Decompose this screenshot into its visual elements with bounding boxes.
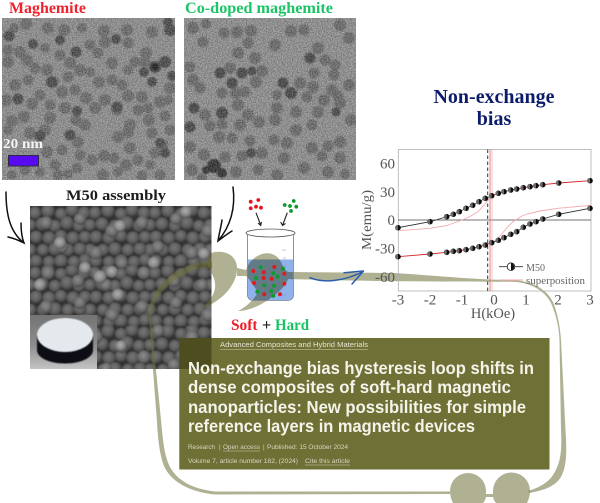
bias marker lines [488,150,492,291]
article meta line: | [219,444,221,451]
M50 curves [398,196,590,243]
title line 2: dense composites of soft-hard magnetic [188,377,511,397]
arrow: maghemite to assembly [6,192,24,243]
panel: M50 SEM micrograph [28,204,214,371]
arrow: co-doped to assembly [218,187,234,241]
x axis tick labels: 2 [554,292,562,308]
article meta line: Research [188,444,215,451]
heading: Co-doped maghemite: Co-doped maghemite [185,0,333,17]
panel: co-doped maghemite TEM micrograph [184,18,357,183]
x axis tick labels: 3 [586,292,594,308]
y axis tick labels: 60 [380,156,395,172]
arrows into beaker [256,213,287,226]
red particles [251,265,286,296]
x axis tick labels [392,292,594,308]
superposition curves [398,196,591,242]
y axis tick labels: 0 [388,213,395,229]
y axis tick labels: 30 [380,185,395,201]
right twin lobes [450,472,530,503]
title line 4: reference layers in magnetic devices [188,416,475,436]
icon: red soft particles [249,198,263,210]
legend: M50: M50 [526,263,545,274]
plus: + [262,317,271,334]
panel: maghemite TEM micrograph [0,17,177,182]
article meta line: Published: 15 October 2024 [267,444,349,451]
volume and citation line: Volume 7, article number 182, (2024) [188,458,298,465]
x axis tick labels: -3 [392,292,404,308]
legend: superposition: superposition [526,276,586,287]
article meta line: | [263,444,265,451]
banner over micrograph [179,338,212,369]
panel: article banner [179,338,550,470]
scale bar [8,156,38,166]
arrow: process to hysteresis loop [310,271,364,284]
legend: M50 [499,263,545,274]
title line 1: Non-exchange bias hysteresis loop shifts in [188,358,534,378]
plot frame [398,150,591,291]
x axis tick labels: -2 [424,292,436,308]
x axis title: H(kOe) [471,306,515,322]
y axis tick labels: -60 [375,270,395,286]
left comma bubble [200,252,237,309]
line two: bias [477,108,511,130]
heading: Maghemite: Maghemite [9,0,86,17]
inset: photo of pressed pellet [30,315,97,369]
volume and citation line: Cite this article [305,458,351,465]
ticks [282,250,286,295]
heading: Non-exchange bias [434,86,555,130]
volume and citation line [188,458,351,465]
article title [188,358,534,436]
y axis tick labels [375,156,395,286]
y axis tick labels: -30 [375,242,395,258]
data markers [395,178,593,260]
banner background [179,338,550,470]
glass [248,233,294,300]
journal section link: Advanced Composites and Hybrid Materials [220,340,368,349]
article meta line [188,444,349,451]
heading: M50 assembly: M50 assembly [66,188,167,204]
green particles [254,265,285,298]
icon: green hard particles [283,199,298,213]
Hard: Hard [275,317,309,334]
red overlap curves [398,181,590,257]
label: Soft + Hard [231,317,309,334]
legend: superposition [499,276,586,287]
rim [246,229,295,237]
left strand [149,262,450,494]
decorative speech-bubble connector band [149,252,566,503]
x axis tick labels: 1 [522,292,530,308]
line one: Non-exchange [434,86,555,108]
title line 3: nanoparticles: New possibilities for simple [188,397,526,417]
icon: beaker with nanoparticle solution [246,229,295,300]
article meta line: Open access [223,444,260,451]
zero field and zero moment lines [398,219,591,221]
chart: M-H hysteresis loop [360,150,594,322]
scale label: 20 nm: 20 nm [3,136,44,151]
water [248,260,293,300]
neck and right comma bubble with band [237,253,566,493]
x axis tick labels: -1 [456,292,468,308]
Soft: Soft [231,317,258,334]
y axis title: M(emu/g) [360,190,375,250]
x axis tick labels: 0 [490,292,498,308]
